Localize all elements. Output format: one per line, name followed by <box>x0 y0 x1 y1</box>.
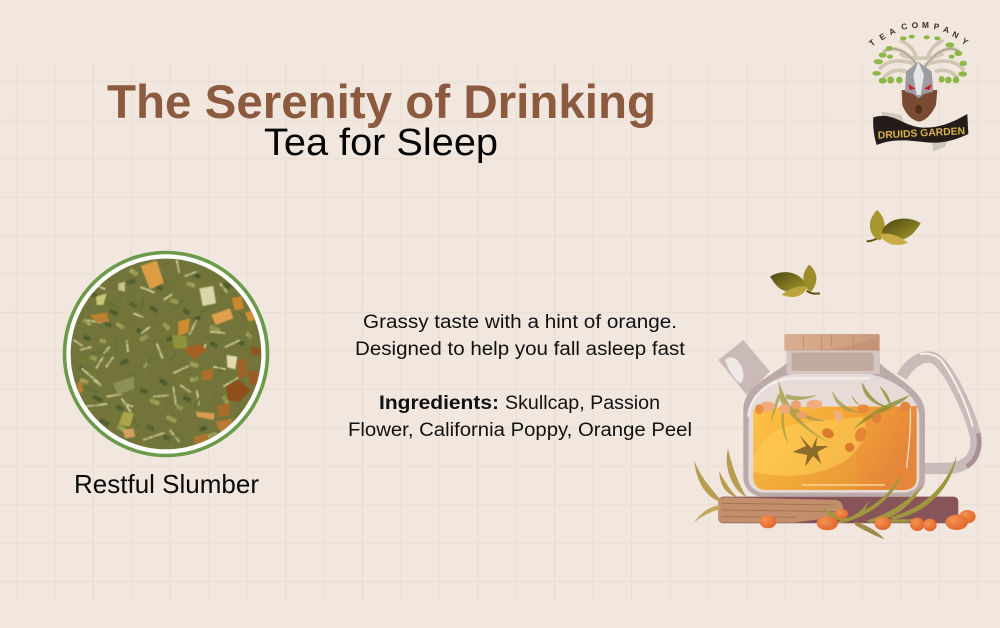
tea orange peel chunks <box>77 261 261 445</box>
logo arc text: M <box>922 20 929 30</box>
logo arc text: P <box>933 21 940 32</box>
logo arc text: Y <box>960 36 971 47</box>
logo: Druids Garden tea company <box>867 20 971 152</box>
description text: Designed to help you fall asleep fast <box>355 339 686 360</box>
subtitle: Tea for Sleep <box>264 122 498 164</box>
logo arc text: N <box>951 29 961 40</box>
icon: falling tea leaves upper <box>867 210 921 245</box>
ingredients text: Ingredients: <box>379 393 499 414</box>
wooden board <box>718 497 958 523</box>
logo arc text: T <box>867 37 877 48</box>
teapot neck <box>787 351 880 374</box>
floating berries <box>755 400 911 452</box>
icon: falling tea leaves lower <box>770 265 820 297</box>
logo arc text <box>867 20 971 48</box>
logo arc text: O <box>911 20 919 30</box>
logo beard and helmet <box>902 62 937 122</box>
logo banner: DRUIDS GARDEN <box>878 126 965 142</box>
description text <box>348 312 692 441</box>
teapot lid <box>784 334 880 351</box>
glass highlights <box>748 378 870 417</box>
teapot handle <box>902 354 979 469</box>
logo arc text: E <box>877 31 888 42</box>
tea name caption: Restful Slumber <box>74 469 259 499</box>
tea liquid <box>753 406 917 490</box>
star anise <box>793 435 829 467</box>
ingredients text: Skullcap, Passion <box>505 393 660 414</box>
illustration: glass teapot on wooden board <box>694 334 979 539</box>
teapot spout <box>718 340 770 395</box>
board berries <box>760 509 976 531</box>
logo tree <box>872 35 967 84</box>
ingredients text: Flower, California Poppy, Orange Peel <box>348 420 692 441</box>
logo arc text: A <box>887 26 897 37</box>
logo arc text: A <box>942 24 951 35</box>
tea photo medallion <box>64 252 268 456</box>
teapot glass body <box>743 350 925 497</box>
description text: Grassy taste with a hint of orange. <box>363 312 677 333</box>
floating sprigs in tea <box>771 379 910 444</box>
loose leaf tea blend <box>67 257 267 453</box>
medallion ring <box>64 252 268 456</box>
pine needle sprigs right <box>823 456 957 539</box>
ingredients text <box>348 393 692 441</box>
logo arc text: C <box>900 21 908 32</box>
pine needle sprigs left <box>694 448 747 523</box>
title: The Serenity of Drinking <box>107 75 656 128</box>
tea pale stems <box>96 282 237 427</box>
